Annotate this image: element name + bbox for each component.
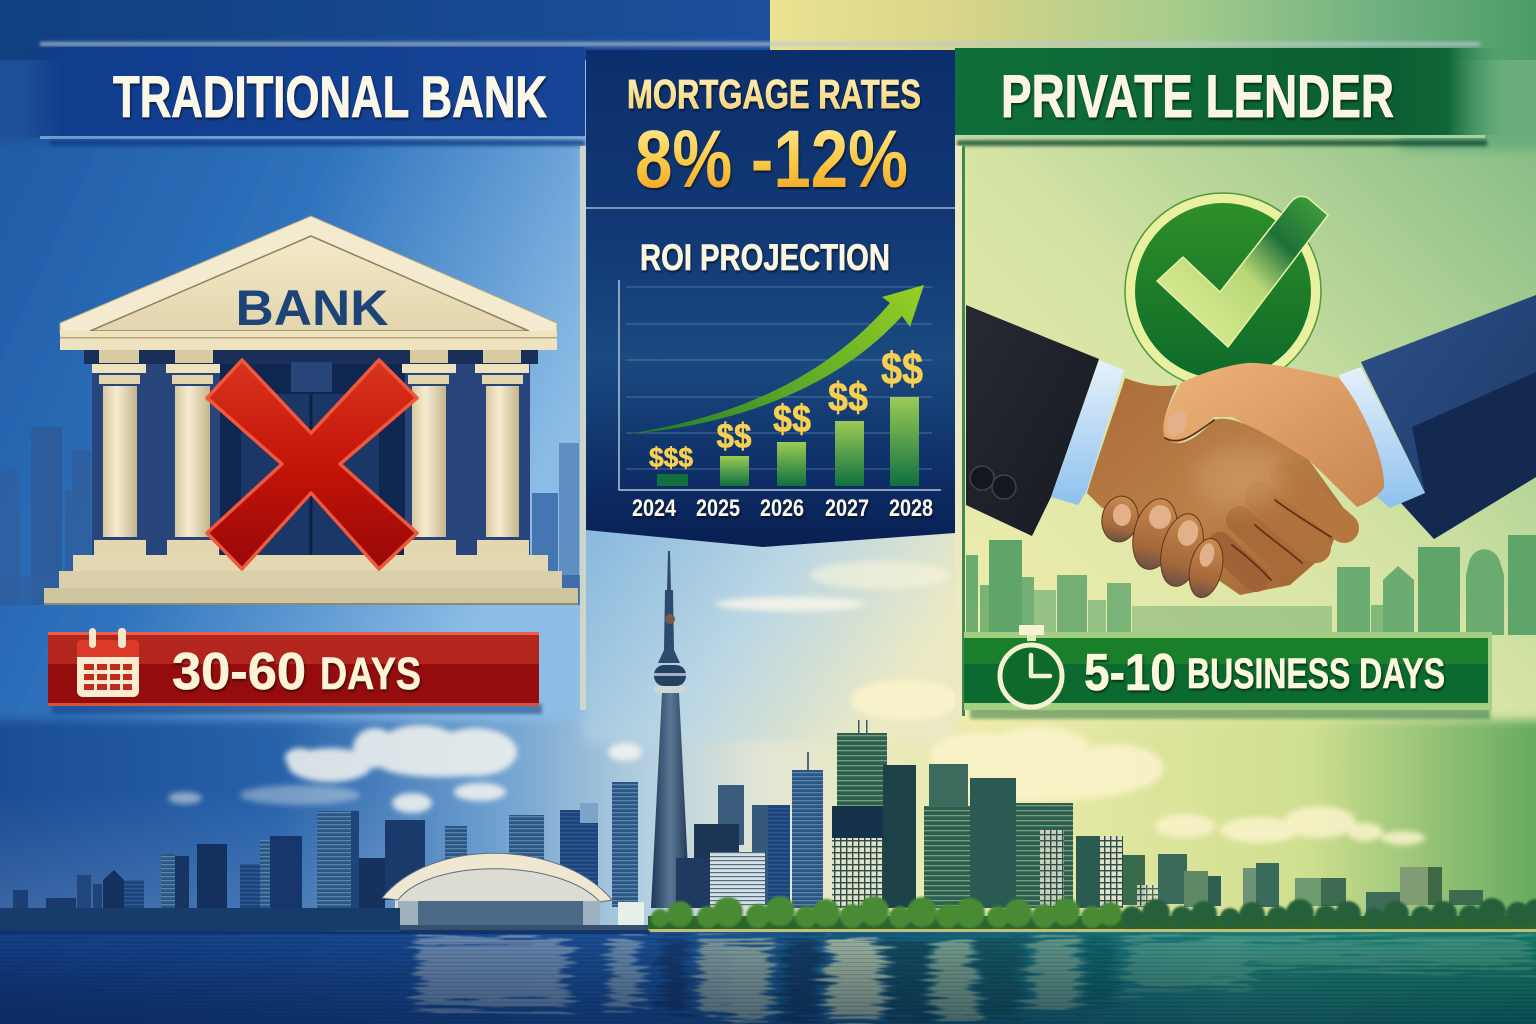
roi heading: ROI PROJECTION	[640, 237, 890, 278]
bar 2024	[657, 474, 688, 486]
icon: stopwatch	[1000, 625, 1062, 707]
time bar: private lender	[964, 625, 1492, 719]
water ripples	[0, 932, 1536, 1024]
bank wall	[92, 350, 530, 555]
skyline	[0, 551, 1536, 933]
time label: 5-10 business days	[1084, 644, 1445, 702]
panel divider: right	[955, 146, 965, 716]
dollar labels: $$	[773, 398, 811, 441]
dollar labels: $$	[716, 417, 752, 456]
check mark	[1157, 196, 1328, 347]
year labels	[632, 495, 933, 522]
reflections	[418, 938, 1530, 1023]
bar 2025	[720, 456, 749, 486]
dollar labels: $$	[881, 343, 923, 394]
finger nails	[1113, 407, 1217, 568]
bank building	[44, 216, 578, 605]
header: traditional bank: TRADITIONAL BANK	[113, 65, 547, 130]
bank label: BANK	[236, 280, 388, 336]
left cuff	[1051, 360, 1124, 505]
time label: 5-10 business days: BUSINESS DAYS	[1187, 650, 1445, 698]
faint skyline: left panel	[0, 427, 580, 605]
shadow band	[84, 350, 538, 364]
finger creases	[1165, 420, 1331, 580]
bar 2026	[777, 442, 806, 486]
right cuff	[1339, 367, 1425, 508]
red x	[207, 360, 417, 569]
shoreline trees	[0, 896, 1536, 933]
header: traditional bank	[25, 47, 585, 146]
chart	[619, 280, 941, 522]
header: private lender	[955, 48, 1503, 146]
cn tower	[651, 551, 690, 908]
time label: 30-60 days: 30-60	[172, 643, 306, 701]
faint skyline: right panel	[966, 535, 1536, 635]
mortgage rates label: MORTGAGE RATES	[627, 71, 921, 117]
header: private lender: PRIVATE LENDER	[1001, 63, 1394, 130]
dollar labels	[649, 343, 923, 473]
left sleeve	[966, 305, 1099, 536]
right hand	[1163, 363, 1384, 507]
left hand	[1087, 378, 1345, 595]
time label: 30-60 days	[172, 643, 421, 701]
time bar: bank	[48, 628, 542, 714]
time label: 30-60 days: DAYS	[320, 648, 421, 699]
pediment	[60, 216, 557, 333]
year labels: 2025	[696, 495, 740, 522]
columns	[92, 350, 529, 555]
lower fingers	[1098, 493, 1228, 601]
dollar labels: $$	[828, 374, 868, 420]
right sleeve	[1361, 295, 1536, 539]
center buildings	[676, 720, 1483, 926]
door	[220, 362, 405, 557]
year labels: 2024	[632, 495, 677, 522]
bar 2027	[835, 421, 864, 486]
bar 2028	[890, 397, 919, 486]
stadium	[382, 853, 644, 926]
growth arrow	[627, 285, 924, 434]
clouds	[168, 561, 1425, 845]
panel divider: left	[580, 146, 586, 710]
rate range: 8% -12%	[635, 114, 908, 205]
year labels: 2027	[825, 495, 869, 522]
dollar labels: $$$	[649, 442, 693, 473]
knuckled fingers	[1220, 478, 1344, 579]
back of hand highlight	[1194, 448, 1286, 508]
entablature	[60, 331, 557, 350]
center panel	[586, 50, 955, 547]
check badge	[1125, 193, 1328, 389]
water	[0, 930, 1536, 1024]
steps	[44, 555, 578, 605]
year labels: 2026	[760, 495, 804, 522]
time label: 5-10 business days: 5-10	[1084, 644, 1176, 702]
left towers	[13, 782, 772, 916]
year labels: 2028	[889, 495, 933, 522]
icon: calendar	[77, 628, 139, 697]
handshake	[966, 295, 1536, 601]
